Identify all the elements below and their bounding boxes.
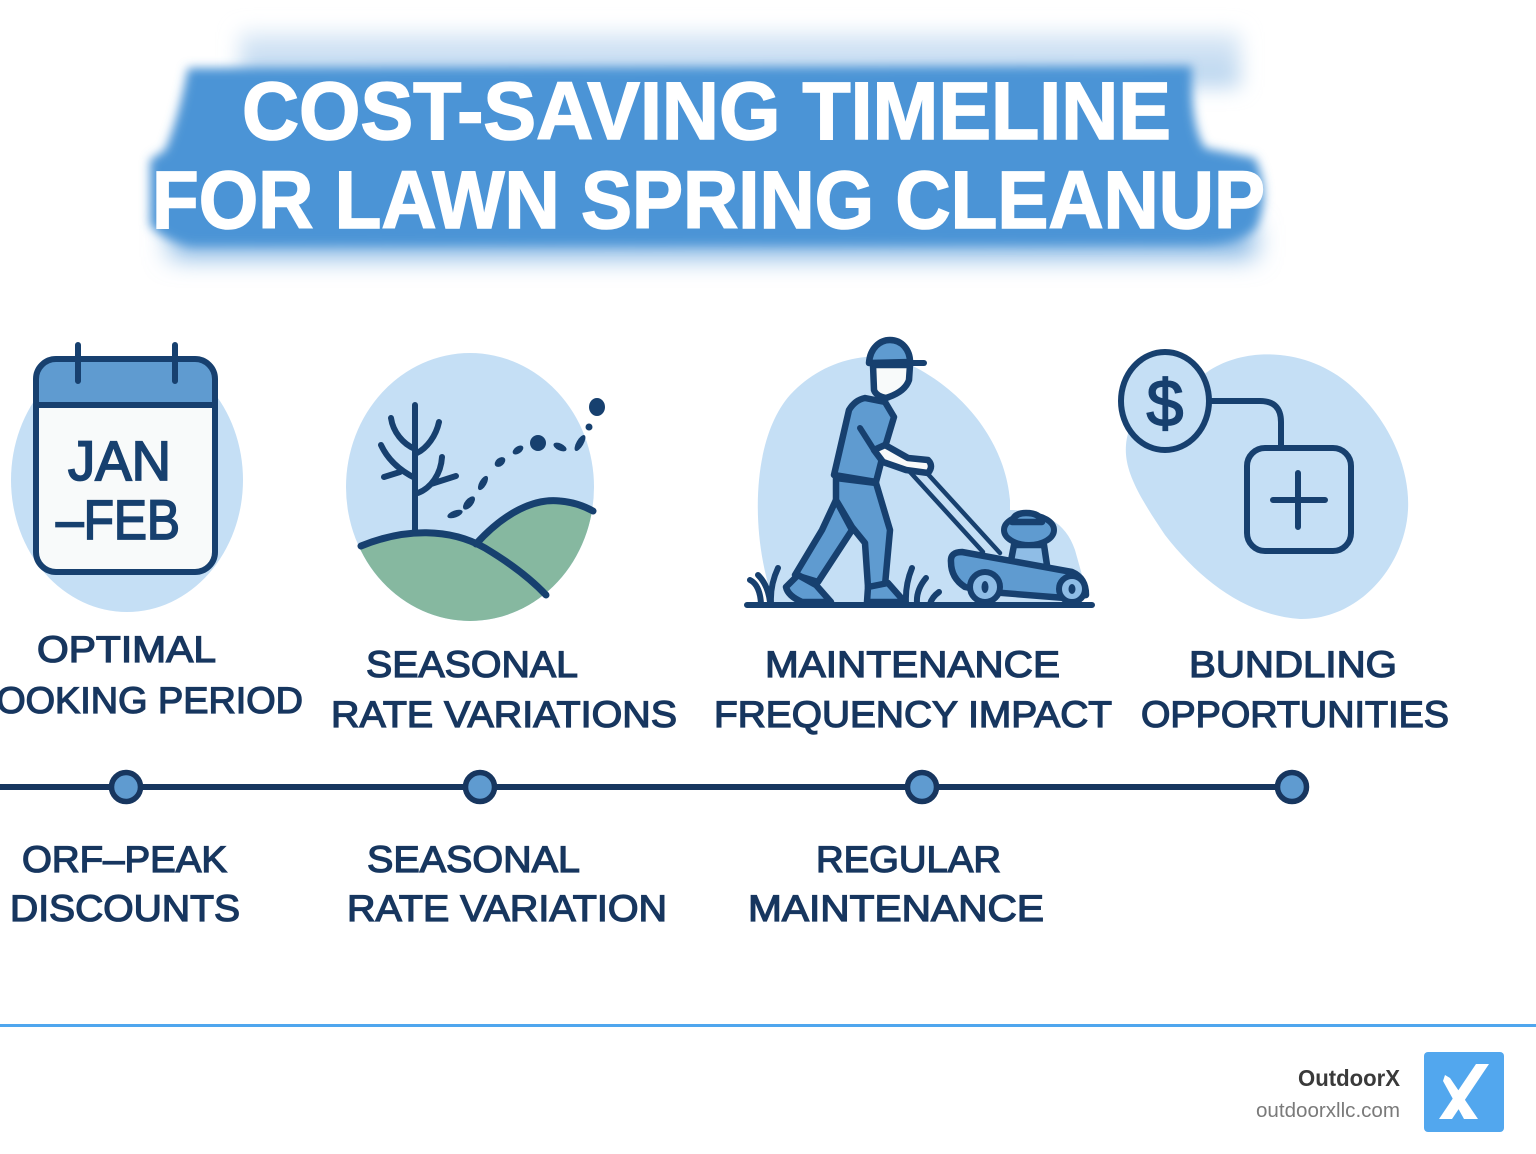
label: off-peak discounts	[10, 839, 240, 929]
label: optimal booking period: OPTIMAL	[37, 629, 216, 670]
label: seasonal rate variation	[347, 839, 667, 929]
icon: calendar	[11, 345, 243, 612]
brand name: OutdoorX	[1298, 1065, 1401, 1091]
trail dots	[446, 398, 605, 520]
brand url: outdoorxllc.com	[1256, 1100, 1400, 1122]
icon: person mowing lawn	[747, 340, 1092, 605]
label: off-peak discounts: DISCOUNTS	[10, 888, 240, 929]
icon: tree and hills	[346, 353, 605, 640]
label: off-peak discounts: ORF–PEAK	[22, 839, 227, 880]
grass and ground	[747, 568, 1092, 605]
label: seasonal rate variations: RATE VARIATIONS	[331, 694, 677, 735]
logo	[1424, 1052, 1504, 1132]
title text: FOR LAWN SPRING CLEANUP	[152, 155, 1265, 246]
calendar date text	[56, 429, 180, 551]
label: bundling opportunities	[1141, 644, 1449, 735]
timeline	[0, 772, 1306, 802]
label: regular maintenance: REGULAR	[816, 839, 1001, 880]
label: seasonal rate variation: RATE VARIATION	[347, 888, 667, 929]
label: regular maintenance: MAINTENANCE	[748, 888, 1044, 929]
dollar sign: $	[1147, 366, 1183, 440]
label: seasonal rate variations	[331, 644, 677, 735]
label: maintenance frequency impact: FREQUENCY IMPACT	[714, 694, 1112, 735]
title text	[152, 66, 1265, 246]
mower operator	[786, 340, 931, 602]
label: optimal booking period	[0, 629, 303, 721]
icon: bundling dollar and plus box	[1121, 352, 1408, 619]
title banner	[150, 32, 1265, 257]
label: maintenance frequency impact: MAINTENANCE	[765, 644, 1060, 685]
calendar date text: JAN	[68, 429, 171, 492]
label: seasonal rate variation: SEASONAL	[367, 839, 580, 880]
title text: COST-SAVING TIMELINE	[242, 66, 1171, 157]
calendar date text: –FEB	[56, 488, 180, 551]
footer	[0, 1024, 1536, 1132]
mower	[910, 472, 1086, 602]
label: seasonal rate variations: SEASONAL	[366, 644, 578, 685]
label: bundling opportunities: OPPORTUNITIES	[1141, 694, 1449, 735]
label: regular maintenance	[748, 839, 1044, 929]
label: maintenance frequency impact	[714, 644, 1112, 735]
label: bundling opportunities: BUNDLING	[1189, 644, 1397, 685]
